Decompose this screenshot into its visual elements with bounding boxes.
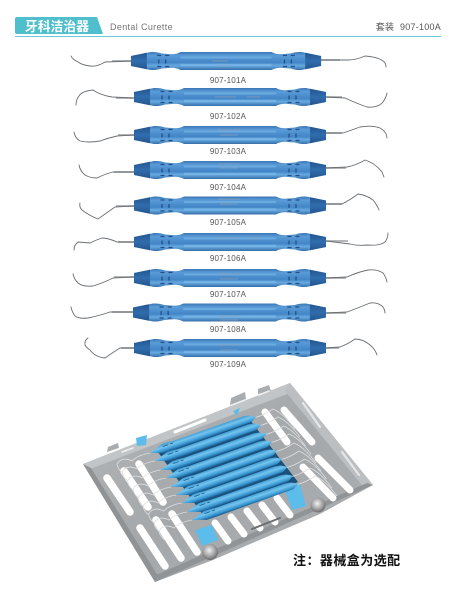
instrument 907-101A [71,52,386,85]
instrument 907-109A: 907-109A [210,360,247,369]
tray tabs [107,385,271,452]
instrument 907-102A: 907-102A [210,112,247,121]
subtitle: Dental Curette [110,22,173,32]
instrument 907-103A [74,126,387,156]
blue holder blocks [136,408,306,546]
instrument 907-105A: 907-105A [210,218,247,227]
instrument 907-101A: 907-101A [210,76,247,85]
instrument 907-103A: 907-103A [210,147,247,156]
title tab [15,17,103,34]
note: 注：器械盒为选配 [293,553,401,568]
tray latch balls [202,544,218,560]
instrument 907-107A: 907-107A [210,290,247,299]
instrument 907-102A [76,88,387,121]
instrument 907-106A: 907-106A [210,254,247,263]
instrument 907-108A: 907-108A [210,325,247,334]
set number: 套装 907-100A [376,21,441,32]
title: 牙科洁治器 [25,19,89,34]
header banner [15,17,441,37]
instrument 907-106A [74,233,388,263]
tool shadow backing [158,420,298,518]
instrument wires [117,409,337,540]
instrument 907-104A: 907-104A [210,183,247,192]
tray body [83,383,373,582]
instrument tray photo [83,383,373,582]
tray slots [107,391,359,566]
instrument 907-104A [79,160,384,192]
instrument 907-109A [85,338,377,369]
instruments in tray [149,413,300,524]
instrument 907-107A [73,269,387,299]
instrument 907-105A [80,194,379,227]
instrument 907-108A [71,303,385,334]
